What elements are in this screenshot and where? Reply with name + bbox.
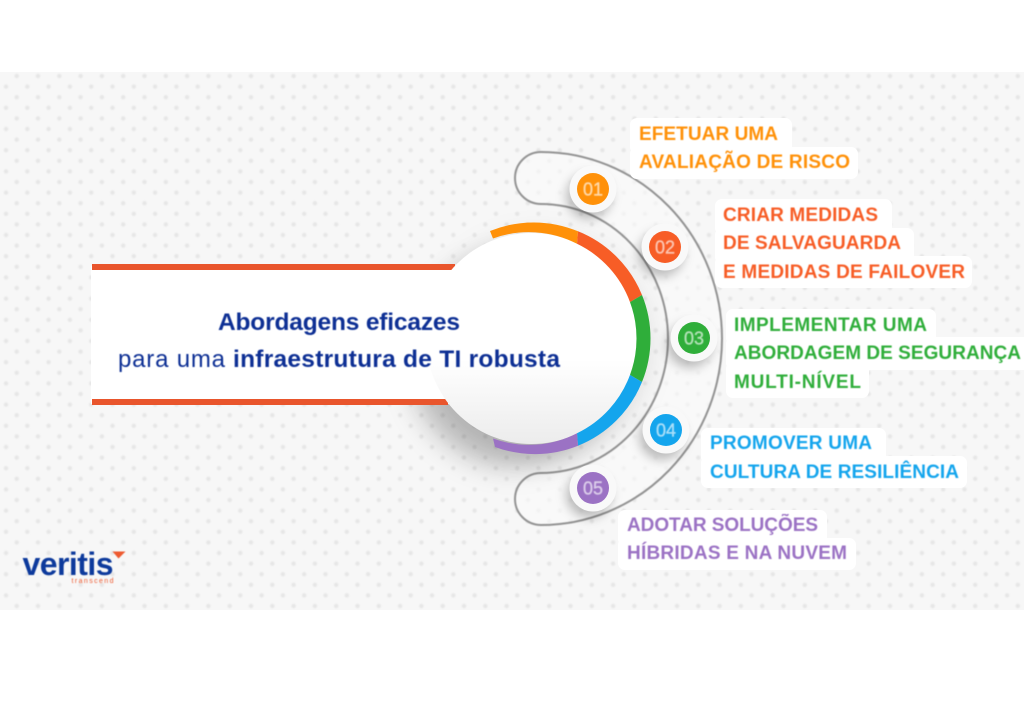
label 03 [726,309,1024,398]
label 02: E MEDIDAS DE FAILOVER [723,262,965,283]
label 05: HÍBRIDAS E NA NUVEM [627,542,847,564]
badge 04: 04 [656,420,676,440]
badge 03 [667,314,718,368]
label 02 [715,199,972,288]
title text [118,309,560,373]
label 02: DE SALVAGUARDA [723,233,901,254]
title text: para uma [118,346,226,373]
title text: infraestrutura de TI robusta [233,346,560,373]
label 04: PROMOVER UMA [710,433,872,454]
badge 02 [638,224,688,277]
badge 05: 05 [583,478,603,498]
ring segment: blue [577,375,642,446]
logo: veritis transcend: veritis [22,546,114,582]
dotted background panel [0,72,1024,610]
label 04 [701,428,967,488]
ring segment: red [577,231,642,302]
disc drop shadow [408,234,650,468]
label 01: AVALIAÇÃO DE RISCO [639,151,850,173]
ring segment: purple [493,433,578,454]
badge 01 [566,166,616,219]
badge 03: 03 [684,328,704,348]
title banner [91,264,461,405]
curved outline track [515,152,722,525]
title text: Abordagens eficazes [218,309,460,336]
ring segment: green [630,295,651,382]
label 05: ADOTAR SOLUÇÕES [627,514,818,536]
label 01: EFETUAR UMA [639,124,778,145]
label 01 [630,118,858,179]
ring segment: orange [490,222,578,244]
badge 04 [639,406,690,460]
label 03: IMPLEMENTAR UMA [734,315,927,336]
logo: veritis transcend: transcend [72,578,114,585]
label 03: MULTI-NÍVEL [734,371,861,393]
label 02: CRIAR MEDIDAS [723,205,878,226]
central disc with segmented ring [426,222,651,454]
badge 02: 02 [655,238,675,258]
badge 05 [566,464,616,518]
badge 01: 01 [583,180,603,200]
label 05 [618,510,856,570]
label 03: ABORDAGEM DE SEGURANÇA [734,343,1021,364]
label 04: CULTURA DE RESILIÊNCIA [710,461,959,483]
